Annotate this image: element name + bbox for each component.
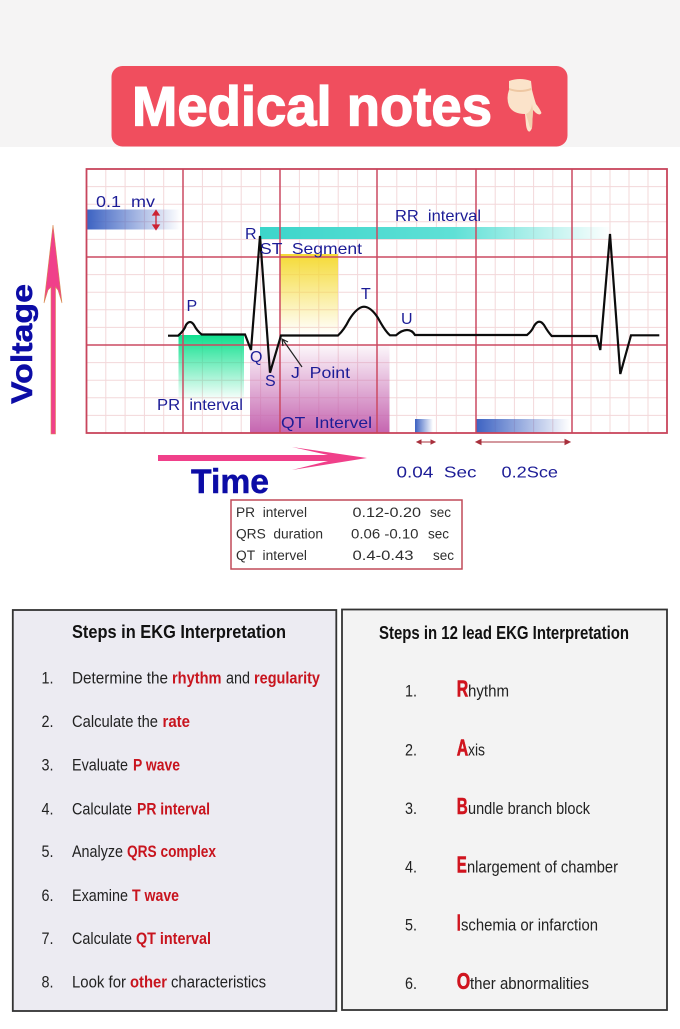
step 8 [42,973,266,992]
step 3: 3. [42,756,54,775]
row: QT interval: 0.4-0.43 [352,548,414,563]
0.04 sec block [415,419,433,433]
step 1: Determine the [72,668,168,687]
step 1: Rhythm [405,676,509,702]
step 2: Axis: 2. [405,741,417,760]
PR interval shading [178,335,244,401]
step 3: Bundle branch block: 3. [405,799,417,818]
step 6: T wave [132,886,179,905]
QT interval shading [250,345,390,433]
label: QT Intervel: QT Intervel [281,415,372,432]
step 2: rate [162,712,190,731]
step 6: Examine [72,886,128,905]
row: PR interval: PR intervel [236,505,307,520]
row: QT interval: sec [433,548,454,563]
title banner [112,66,568,146]
step 1: Rhythm: R [457,676,468,702]
step 7: 7. [42,929,54,948]
step 8: 8. [42,973,54,992]
step 1: 1. [42,668,54,687]
step 2: 2. [42,712,54,731]
0.04 sec scale [396,440,476,482]
step 4: Calculate [72,799,132,818]
label: ST Segment: ST Segment [260,241,363,258]
step 8: other [130,973,167,992]
step 4: Enlargement of chamber: 4. [405,858,417,877]
label: 0.1 mv: 0.1 mv [96,194,155,211]
step 4: Enlargement of chamber: nlargement of chamber [467,858,618,877]
panel: steps in 12 lead EKG interpretation [342,610,667,1010]
row: QT interval [236,548,454,563]
step 2: Axis [405,735,485,761]
step 1 [42,668,320,687]
step 4: Enlargement of chamber: E [457,852,467,878]
0.2 sec block [476,419,570,433]
step 7: Calculate [72,929,132,948]
voltage label: Voltage [6,284,39,404]
step 1: and [226,668,250,687]
step 6: Other abnormalities [405,968,589,994]
time axis arrow [158,447,367,470]
step 4: Enlargement of chamber [405,852,618,878]
panel: steps in EKG interpretation [13,610,336,1011]
step 1: Rhythm: 1. [405,682,417,701]
step 5: QRS complex [127,842,216,861]
step 3: Bundle branch block [405,793,590,819]
time label: Time [191,463,269,501]
step 2: Axis: A [457,735,468,761]
step 2: Axis: xis [468,741,485,760]
label: PR interval: PR interval [157,397,243,414]
step 3: Evaluate [72,756,128,775]
heading: Steps in 12 lead EKG Interpretation [379,622,629,643]
0.1 mv arrow [153,210,159,230]
step 4: 4. [42,799,54,818]
0.04 sec scale: 0.04 Sec [396,464,476,482]
label: J Point: J Point [291,365,351,382]
RR interval bar [260,227,612,239]
minor grid [86,169,667,433]
step 5: Ischemia or infarction: I [457,910,461,936]
label: U: U [401,311,413,328]
step 7: QT interval [136,929,211,948]
0.2 sec scale [476,440,570,482]
label: Q: Q [250,349,262,366]
step 6: Other abnormalities: ther abnormalities [470,974,589,993]
title text: Medical notes [132,74,492,138]
ECG trace [168,234,659,374]
step 3 [42,756,180,775]
step 3: Bundle branch block: undle branch block [468,799,590,818]
step 1: regularity [254,668,320,687]
0.1 mv bar [86,210,180,230]
row: QRS duration [236,527,449,542]
step 1: Rhythm: hythm [468,682,509,701]
step 5: Ischemia or infarction: schemia or infarction [461,916,598,935]
step 3: Bundle branch block: B [457,793,468,819]
row: QT interval: QT intervel [236,548,307,563]
row: PR interval: 0.12-0.20 [352,505,421,520]
step 5: Ischemia or infarction: 5. [405,916,417,935]
voltage axis arrow [44,225,62,434]
row: QRS duration: 0.06 -0.10 [351,527,418,542]
step 5 [42,842,216,861]
step 5: Ischemia or infarction [405,910,598,936]
step 2 [42,712,190,731]
ECG chart [86,169,667,433]
step 4 [42,799,210,818]
label: S: S [265,373,276,390]
0.2 sec scale: 0.2Sce [502,464,558,482]
step 1: rhythm [172,668,222,687]
normal values table [231,500,462,569]
step 3: P wave [133,756,180,775]
label: RR interval: RR interval [395,208,481,225]
row: QRS duration: sec [428,527,449,542]
J point arrow [282,339,302,367]
step 8: characteristics [171,973,266,992]
step 6: Other abnormalities: 6. [405,974,417,993]
icon: hand pointing down [508,79,542,132]
row: PR interval: sec [430,505,451,520]
step 6 [42,886,179,905]
step 6: Other abnormalities: O [457,968,470,994]
step 4: PR interval [137,799,210,818]
step 7 [42,929,211,948]
label: R: R [245,226,257,243]
step 2: Calculate the [72,712,158,731]
heading: Steps in EKG Interpretation [72,621,286,642]
label: P: P [186,298,197,315]
step 5: 5. [42,842,54,861]
label: T: T [361,286,371,303]
step 5: Analyze [72,842,123,861]
major grid [86,169,667,433]
row: QRS duration: QRS duration [236,527,323,542]
ST segment shading [280,254,338,334]
step 8: Look for [72,973,126,992]
row: PR interval [236,505,451,520]
step 6: 6. [42,886,54,905]
